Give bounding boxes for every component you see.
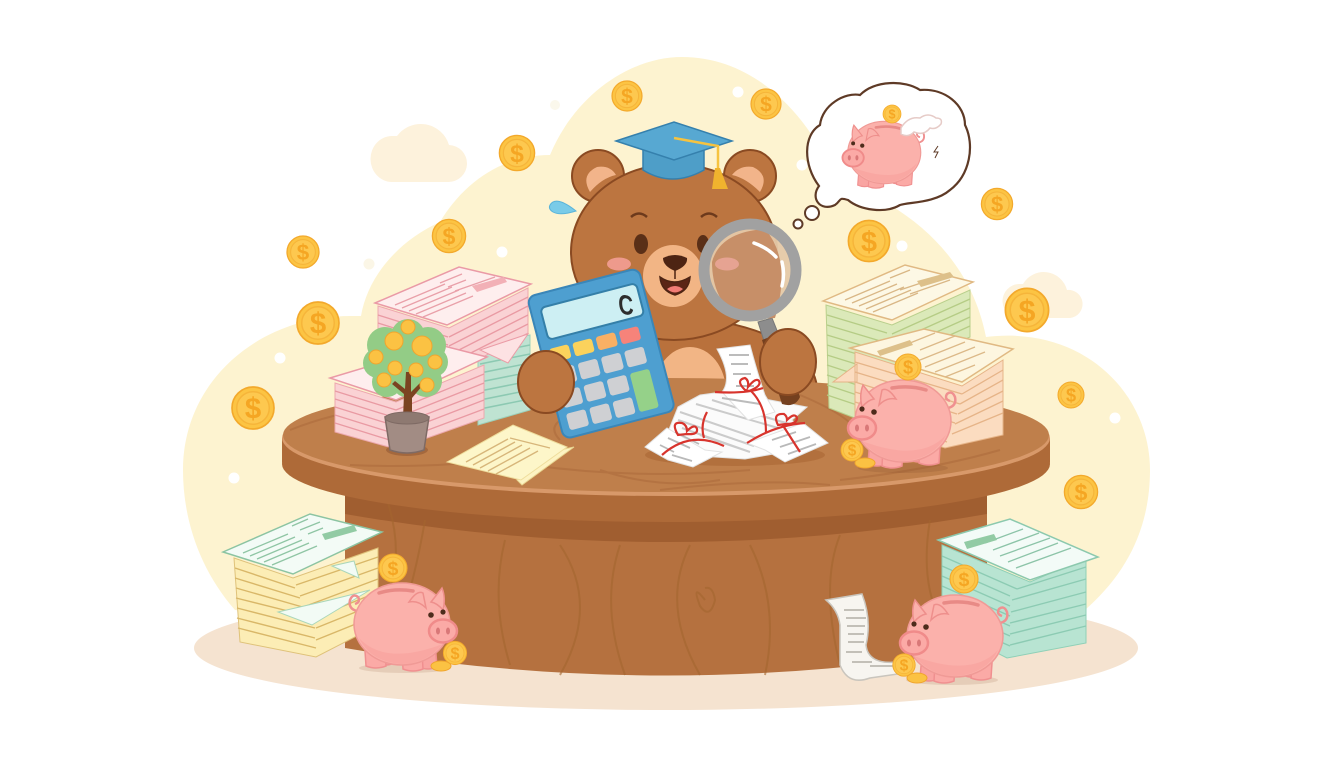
icon: flying piggy bank: $ [888, 108, 896, 121]
pig bottom right [893, 565, 1007, 685]
coin: $ [760, 94, 772, 117]
curled receipt [826, 594, 898, 680]
platform ellipse [194, 586, 1138, 710]
right paw [760, 329, 816, 395]
background blob [183, 57, 1150, 660]
sweat drop [549, 201, 576, 214]
coin: $ [510, 141, 524, 168]
coin [981, 188, 1013, 220]
stack: teal bottom right [938, 519, 1098, 658]
coin: $ [903, 357, 913, 378]
eyes and brows [634, 234, 648, 254]
cloud right [1003, 272, 1083, 318]
coin: $ [1075, 479, 1088, 505]
coin [848, 220, 890, 262]
coin [751, 89, 781, 119]
body [533, 318, 817, 462]
cheek [607, 258, 631, 270]
coin [1058, 382, 1084, 408]
coin [287, 236, 319, 268]
buttons [549, 326, 659, 430]
muzzle [643, 245, 703, 307]
sparkle dots [228, 86, 1120, 484]
ears [572, 150, 776, 202]
stack: green [823, 265, 973, 420]
coin: $ [310, 307, 326, 341]
coin: $ [1019, 295, 1036, 328]
coin [1005, 288, 1049, 332]
coin: $ [848, 443, 857, 460]
loose paper on table [447, 425, 574, 485]
belly [654, 347, 726, 437]
coin: $ [861, 226, 877, 258]
cloud left [370, 124, 467, 182]
bear [533, 150, 817, 462]
stack: yellow bottom left [223, 514, 382, 657]
money tree [363, 319, 448, 456]
coin: $ [621, 86, 633, 109]
inner ears [586, 167, 764, 192]
thought bubble [794, 83, 970, 229]
coin: $ [450, 645, 460, 663]
coin [232, 387, 274, 429]
coin [612, 81, 642, 111]
icon: flying piggy bank [842, 105, 941, 188]
table base [345, 470, 987, 676]
display [540, 283, 644, 340]
magnifying glass [704, 224, 800, 405]
pig and coin on table [841, 354, 955, 473]
calculator: C [617, 290, 635, 322]
nose and mouth [663, 255, 687, 271]
graduation cap [616, 122, 732, 189]
coin [297, 302, 339, 344]
pig bottom left [350, 554, 467, 673]
coin [432, 219, 466, 253]
stack: pink back [375, 267, 531, 375]
coin: $ [991, 192, 1003, 217]
left paw [518, 351, 574, 413]
coin: $ [1066, 385, 1076, 406]
stack: teal mid-left [478, 335, 530, 425]
table top [282, 378, 1050, 522]
stack: peach [833, 329, 1013, 448]
coin [499, 135, 535, 171]
receipts pile with ribbons [645, 345, 828, 467]
head [571, 164, 777, 340]
coin: $ [388, 558, 399, 580]
stack: pink front [330, 345, 487, 449]
coin: $ [297, 240, 310, 265]
coin [1064, 475, 1098, 509]
coin: $ [443, 223, 456, 249]
calculator [527, 268, 675, 439]
coin: $ [959, 569, 970, 591]
coin: $ [900, 658, 909, 675]
coin: $ [245, 392, 261, 426]
